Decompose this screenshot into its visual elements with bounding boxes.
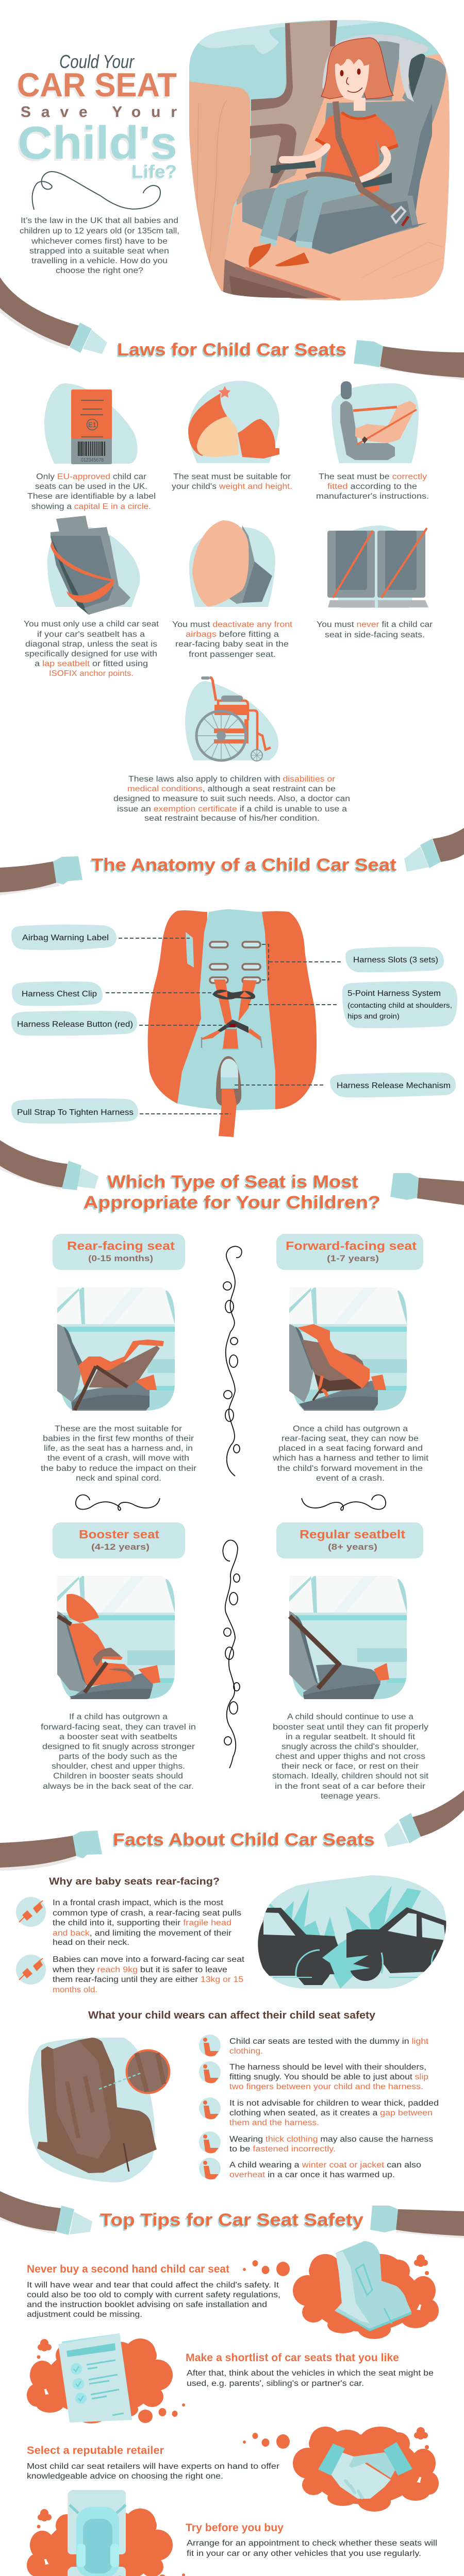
description: booster seat	[41, 1713, 196, 1791]
law 4 text: ISOFIX anchor points.	[49, 669, 134, 678]
section banner: anatomy straps	[0, 828, 464, 895]
tip 2 text: After that, think about the vehicles in which the seat might be	[187, 2369, 434, 2378]
heading: facts: Facts About Child Car Seats	[113, 1830, 375, 1850]
title: Save Your	[21, 104, 177, 121]
description: booster seat: Children in booster seats should	[53, 1772, 183, 1781]
title: Child's	[18, 117, 177, 169]
section banner: laws strap right	[354, 340, 464, 380]
wheelchair icon	[185, 676, 278, 761]
label: harness slots	[262, 944, 444, 980]
law 7 text	[113, 775, 350, 823]
description: regular seatbelt: in the front seat of a car before their	[275, 1782, 425, 1791]
intro text	[20, 216, 179, 275]
description: regular seatbelt: stomach. Ideally, children should not sit	[272, 1772, 429, 1781]
fact text 2: when they reach 9kg but it is safer to leave	[52, 1965, 227, 1974]
decorative swirl	[32, 172, 160, 210]
clothing text 3: It is not advisable for children to wear thick, padded	[229, 2099, 439, 2108]
description: rear-facing seat: the event of a crash, will move with	[47, 1454, 189, 1463]
law 3: fitted seat icon	[332, 381, 419, 463]
description: regular seatbelt: in a regular seatbelt. It should fit	[286, 1733, 416, 1741]
label box: rear-facing seat	[53, 1234, 185, 1270]
label: release button	[11, 1011, 228, 1036]
law 5 text: front passenger seat.	[189, 650, 276, 659]
label: airbag warning	[11, 925, 190, 950]
tip 1 text: could also be too old to comply with current safety regulations,	[27, 2291, 280, 2299]
heading: anatomy: The Anatomy of a Child Car Seat	[91, 855, 396, 875]
tip 3 text	[27, 2462, 279, 2481]
description: forward-facing seat: event of a crash.	[316, 1474, 385, 1483]
fact text 1	[53, 1899, 241, 1947]
law 6 text	[317, 620, 433, 639]
tip 1 illustration: worn seat	[243, 2241, 439, 2339]
title: Could Your	[59, 51, 135, 72]
icon: info 2	[199, 2061, 221, 2083]
intro text: children up to 12 years old (or 135cm tall,	[20, 227, 179, 235]
law 6: side-facing seats icon	[327, 526, 428, 608]
section banner: facts straps	[0, 1790, 464, 1871]
label box: booster seat	[53, 1522, 185, 1558]
label box: booster seat: Booster seat	[79, 1528, 159, 1541]
law 3 text: fitted according to the	[327, 482, 417, 491]
icon: info 5	[199, 2158, 221, 2179]
anatomy diagram: child car seat	[148, 909, 317, 1137]
description: forward-facing seat: Once a child has outgrown a	[293, 1425, 408, 1433]
tip 4 text: fit in your car or any other vehicles that you use regularly.	[187, 2549, 421, 2558]
fact text 2: Babies can move into a forward-facing car seat	[53, 1955, 245, 1964]
subheading: what your child wears: What your child wears can affect their child seat safety	[88, 2010, 376, 2021]
label box: forward-facing seat: Forward-facing seat	[286, 1239, 417, 1252]
label: 5-point harness: (contacting child at shoulders,	[347, 1002, 452, 1009]
law 4 text: specifically designed for use with	[25, 650, 157, 658]
clothing text 4: Wearing thick clothing may also cause the harness	[229, 2135, 433, 2144]
intro text: whichever comes first) have to be	[31, 237, 168, 246]
squiggle divider bottom	[223, 1540, 240, 1768]
label: harness slots: Harness Slots (3 sets)	[353, 956, 438, 964]
heading: which type of seat: Which Type of Seat is Most	[107, 1172, 358, 1192]
law 4 text: a lap seatbelt or fitted using	[35, 659, 148, 668]
clothing text 3: clothing when seated, as it creates a gap between	[229, 2109, 433, 2117]
tip 2 text	[187, 2369, 434, 2388]
icon: seatbelt 2	[16, 1955, 46, 1985]
law 2 text: your child's weight and height.	[172, 482, 292, 491]
intro text: choose the right one?	[56, 266, 143, 275]
label box: booster seat: (4-12 years)	[91, 1542, 150, 1552]
description: rear-facing seat	[41, 1425, 196, 1483]
description: forward-facing seat: rear-facing seat, they can now be	[281, 1434, 419, 1443]
title	[17, 51, 177, 182]
heading: which type of seat	[84, 1172, 380, 1212]
law 1 text: seats can be used in the UK.	[35, 482, 147, 491]
law 2 text	[172, 472, 292, 491]
icon: seatbelt 1	[16, 1897, 46, 1927]
law 1: label icon	[44, 383, 138, 464]
label: 5-point harness: 5-Point Harness System	[347, 989, 441, 998]
law 4 text: if your car's seatbelt has a	[37, 630, 145, 639]
description: regular seatbelt	[272, 1713, 429, 1801]
description: regular seatbelt: teenage years.	[321, 1792, 380, 1801]
label box: forward-facing seat: (1-7 years)	[327, 1253, 379, 1263]
hero illustration: girl in booster seat	[186, 15, 454, 304]
clothing text 2: fitting snugly. You should be able to just about slip	[229, 2073, 428, 2081]
description: regular seatbelt: A child should continue to use a	[287, 1713, 413, 1721]
clothing text 1	[229, 2037, 429, 2056]
fact text 1: the child into it, supporting their fragile head	[53, 1919, 231, 1927]
clothing text 2	[229, 2063, 428, 2091]
label: pull strap: Pull Strap To Tighten Harness	[17, 1108, 134, 1117]
icon: info 4	[199, 2131, 221, 2153]
law 7 text: designed to measure to suit such needs. Also, a doctor can	[113, 794, 350, 803]
label: chest clip	[12, 981, 213, 1006]
clothing text 5	[229, 2161, 421, 2179]
law 5 text: rear-facing baby seat in the	[175, 640, 289, 649]
tip 1 text: It will have wear and tear that could affect the child's safety. It	[27, 2281, 279, 2290]
description: regular seatbelt: booster seat until they can fit properly	[273, 1723, 428, 1732]
illustration: regular seatbelt	[289, 1576, 407, 1699]
fact text 2: them rear-facing until they are either 13kg or 15	[53, 1975, 243, 1984]
label: release mechanism: Harness Release Mechanism	[337, 1081, 451, 1090]
law 3 text	[316, 472, 429, 501]
fact text 1: common type of crash, a rear-facing seat pulls	[53, 1909, 241, 1918]
description: rear-facing seat: neck and spinal cord.	[76, 1474, 161, 1483]
label box: forward-facing seat	[276, 1234, 423, 1270]
clothing text 2: The harness should be level with their shoulders,	[229, 2063, 426, 2072]
law 7 text: medical conditions , although a seat restraint can be	[127, 785, 336, 793]
section banner: top tips straps	[0, 2191, 464, 2239]
label: chest clip: Harness Chest Clip	[22, 990, 97, 998]
description: forward-facing seat: the child's forward movement in the	[277, 1464, 423, 1473]
description: forward-facing seat	[272, 1425, 429, 1483]
tip 1 text: and the instruction booklet advising on safe installation and	[27, 2300, 267, 2309]
clothing text 5: A child wearing a winter coat or jacket can also	[229, 2161, 421, 2170]
law 5 text: You must deactivate any front	[172, 620, 293, 629]
tip 2 text: used, e.g. parents', sibling's or partner's car.	[187, 2379, 364, 2388]
tip 1 text	[27, 2281, 280, 2319]
description: rear-facing seat: babies in the first few months of their	[43, 1434, 194, 1443]
tip 3 text: Most child car seat retailers will have experts on hand to offer	[27, 2462, 279, 2471]
clothing text 1: Child car seats are tested with the dummy in light	[229, 2037, 429, 2046]
description: booster seat: parts of the body such as the	[59, 1752, 177, 1761]
squiggle divider top	[223, 1246, 242, 1476]
tip 4 heading: Try before you buy	[186, 2522, 284, 2534]
law 4 text: diagonal strap, unless the seat is	[25, 640, 157, 649]
description: regular seatbelt: chest and upper thighs and not cross	[275, 1752, 425, 1761]
clothing text 3: them and the harness.	[229, 2119, 319, 2127]
clothing text 3	[229, 2099, 439, 2127]
law 1 text: These are identifiable by a label	[27, 492, 156, 501]
law 4: diagonal strap icon	[47, 516, 140, 615]
illustration: booster seat	[57, 1576, 175, 1699]
tip 2 heading: Make a shortlist of car seats that you like	[186, 2352, 399, 2364]
intro text: travelling in a vehicle. How do you	[31, 257, 168, 265]
law 5 text: airbags before fitting a	[186, 630, 279, 639]
clothing text 4: to be fastened incorrectly.	[229, 2145, 336, 2154]
tip 3 illustration: handshake	[243, 2427, 439, 2512]
section banner: laws strap left	[0, 277, 107, 354]
law 2: baby icon	[188, 381, 279, 463]
illustration: brown car seat	[28, 2038, 169, 2182]
tip 1 text: adjustment could be missing.	[27, 2310, 142, 2319]
heading: laws: Laws for Child Car Seats	[117, 340, 346, 360]
tip 2 illustration: checklist	[27, 2333, 185, 2424]
section banner: seat types straps	[0, 1140, 464, 1205]
law 3 text: manufacturer's instructions.	[316, 492, 429, 501]
intro text: strapped into a suitable seat when	[29, 247, 169, 256]
tip 4 text: Arrange for an appointment to check whether these seats will	[187, 2539, 437, 2548]
description: forward-facing seat: which has a harness and tether to limit	[272, 1454, 429, 1463]
tip 4 text	[187, 2539, 437, 2558]
tip 3 text: knowledgeable advice on choosing the right one.	[27, 2472, 223, 2481]
label box: rear-facing seat: (0-15 months)	[88, 1253, 153, 1263]
law 5 text	[172, 620, 293, 659]
law 1 text: showing a capital E in a circle.	[31, 502, 151, 511]
label: pull strap	[11, 1098, 231, 1124]
law 7 text: seat restraint because of his/her condition.	[144, 814, 320, 823]
law 1 text	[27, 472, 156, 511]
description: regular seatbelt: their neck or face, or rest on their	[281, 1762, 419, 1771]
description: booster seat: a booster seat with seatbelts	[59, 1733, 177, 1741]
illustration: forward-facing seat	[289, 1287, 407, 1411]
label box: rear-facing seat: Rear-facing seat	[67, 1239, 175, 1252]
description: booster seat: shoulder, chest and upper thighs.	[52, 1762, 185, 1771]
label: 5-point harness	[248, 981, 457, 1028]
law 1: label icon: 012345678	[81, 457, 104, 463]
label box: regular seatbelt: (8+ years)	[328, 1542, 377, 1552]
law 3 text: The seat must be correctly	[319, 472, 427, 481]
fact text 2	[52, 1955, 245, 1994]
description: rear-facing seat: the baby to reduce the impact on their	[41, 1464, 196, 1473]
illustration: car crash	[253, 1875, 449, 1989]
law 4 text	[24, 620, 159, 678]
label: airbag warning: Airbag Warning Label	[22, 934, 109, 942]
subheading: why rear-facing: Why are baby seats rear-facing?	[49, 1876, 220, 1887]
fact text 2: months old.	[53, 1986, 97, 1994]
law 1: label icon: E1	[88, 421, 96, 429]
law 4 text: You must only use a child car seat	[24, 620, 159, 629]
law 6 text: You must never fit a child car	[317, 620, 433, 629]
label box: regular seatbelt	[276, 1522, 423, 1558]
law 7 text: issue an exemption certificate if a child is unable to use a	[117, 805, 347, 814]
law 2 text: The seat must be suitable for	[173, 472, 291, 481]
title: CAR SEAT	[17, 66, 177, 104]
clothing text 1: clothing.	[229, 2047, 263, 2056]
flourish right	[302, 1495, 386, 1510]
fact text 1: In a frontal crash impact, which is the most	[53, 1899, 224, 1907]
fact text 1: and back , and limiting the movement of their	[53, 1929, 231, 1938]
description: rear-facing seat: life, as the seat has a harness and, in	[44, 1444, 193, 1453]
description: booster seat: designed to fit snugly across stronger	[42, 1742, 195, 1751]
intro text: It’s the law in the UK that all babies and	[21, 216, 178, 225]
description: booster seat: always be in the back seat of the car.	[43, 1782, 194, 1791]
tip 4 illustration: seat from above	[27, 2490, 185, 2576]
heading: which type of seat: Appropriate for Your Children?	[84, 1193, 380, 1212]
title: Life?	[131, 162, 177, 182]
heading: top tips: Top Tips for Car Seat Safety	[100, 2210, 363, 2230]
tip 3 heading: Select a reputable retailer	[27, 2445, 164, 2456]
illustration: rear-facing seat	[57, 1287, 175, 1411]
description: regular seatbelt: snugly across the child's shoulder,	[281, 1742, 419, 1751]
law 7 text: These laws also apply to children with disabilities or	[128, 775, 335, 784]
law 5: airbag icon	[189, 520, 275, 607]
description: booster seat: If a child has outgrown a	[69, 1713, 168, 1721]
tip 1 heading: Never buy a second hand child car seat	[27, 2263, 229, 2275]
label: release mechanism	[235, 1073, 456, 1097]
law 1 text: Only EU-approved child car	[36, 472, 146, 481]
clothing text 2: two fingers between your child and the harness.	[229, 2082, 423, 2091]
clothing text 4	[229, 2135, 433, 2154]
icon: info 1	[199, 2035, 221, 2056]
label: 5-point harness: hips and groin)	[347, 1012, 400, 1020]
description: forward-facing seat: placed in a seat facing forward and	[278, 1444, 423, 1453]
clothing text 5: overheat in a car once it has warmed up.	[229, 2171, 395, 2179]
law 6 text: seat in side-facing seats.	[325, 631, 425, 639]
label box: regular seatbelt: Regular seatbelt	[300, 1528, 405, 1541]
description: booster seat: forward-facing seat, they can travel in	[41, 1723, 196, 1732]
label: release button: Harness Release Button (red)	[17, 1020, 133, 1029]
description: rear-facing seat: These are the most suitable for	[55, 1425, 182, 1433]
flourish left	[76, 1495, 160, 1510]
icon: info 3	[199, 2097, 221, 2119]
fact text 1: head on their neck.	[53, 1938, 129, 1947]
